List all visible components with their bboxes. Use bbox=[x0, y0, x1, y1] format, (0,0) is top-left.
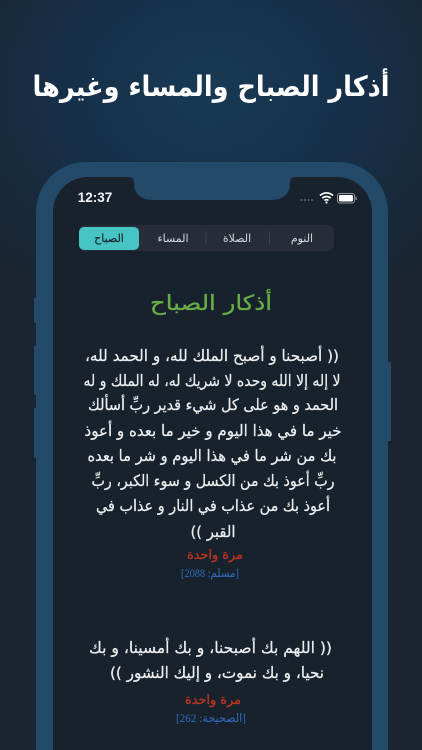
source reference 2: [الصحيحة: 262] bbox=[176, 711, 246, 725]
dhikr block 2: نحيا، و بك نموت، و إليك النشور )) bbox=[110, 664, 324, 683]
segmented control bbox=[79, 225, 334, 251]
tab labels: الصلاة bbox=[223, 232, 251, 245]
icon: wifi bbox=[320, 193, 333, 203]
dhikr block 1 bbox=[84, 345, 342, 541]
phone side buttons bbox=[34, 298, 391, 458]
status bar bbox=[78, 190, 357, 205]
dhikr block 2: (( اللهم بك أصبحنا، و بك أمسينا، و بك bbox=[89, 637, 332, 658]
phone frame bbox=[36, 162, 388, 750]
dhikr block 1: القبر )) bbox=[190, 523, 236, 541]
dhikr block 1: خير ما في هذا اليوم و خير ما بعده و أعوذ bbox=[84, 420, 342, 441]
source reference 1: [مسلم: 2088] bbox=[181, 566, 239, 580]
signal dots bbox=[300, 199, 313, 201]
active segment bbox=[79, 227, 139, 250]
section heading: أذكار الصباح bbox=[150, 289, 272, 315]
icon: battery bbox=[338, 194, 357, 203]
repeat count 2: مرة واحدة bbox=[185, 693, 241, 708]
tab labels: الصباح bbox=[94, 232, 124, 245]
dhikr block 1: ربِّ أعوذ بك من الكسل و سوء الكبر، ربِّ bbox=[92, 470, 334, 491]
phone screen bbox=[53, 177, 372, 750]
dhikr block 1: أعوذ بك من عذاب في النار و عذاب في bbox=[96, 495, 330, 516]
dhikr block 1: لا إله إلا الله وحده لا شريك له، له الملك و له bbox=[84, 372, 340, 391]
dhikr block 2 bbox=[89, 637, 332, 683]
dhikr block 1: (( أصبحنا و أصبح الملك لله، و الحمد لله، bbox=[85, 345, 339, 366]
dhikr block 1: بك من شر ما في هذا اليوم و شر ما بعده bbox=[88, 447, 336, 466]
time: 12:37 bbox=[78, 190, 112, 205]
title: أذكار الصباح والمساء وغيرها bbox=[32, 68, 390, 103]
tab labels: المساء bbox=[157, 232, 189, 245]
phone mockup bbox=[34, 162, 391, 750]
tab labels: النوم bbox=[291, 232, 313, 245]
repeat count 1: مرة واحدة bbox=[187, 548, 243, 563]
dhikr block 1: الحمد و هو على كل شيء قدير ربِّ أسألك bbox=[88, 394, 338, 415]
tab labels bbox=[94, 232, 313, 245]
